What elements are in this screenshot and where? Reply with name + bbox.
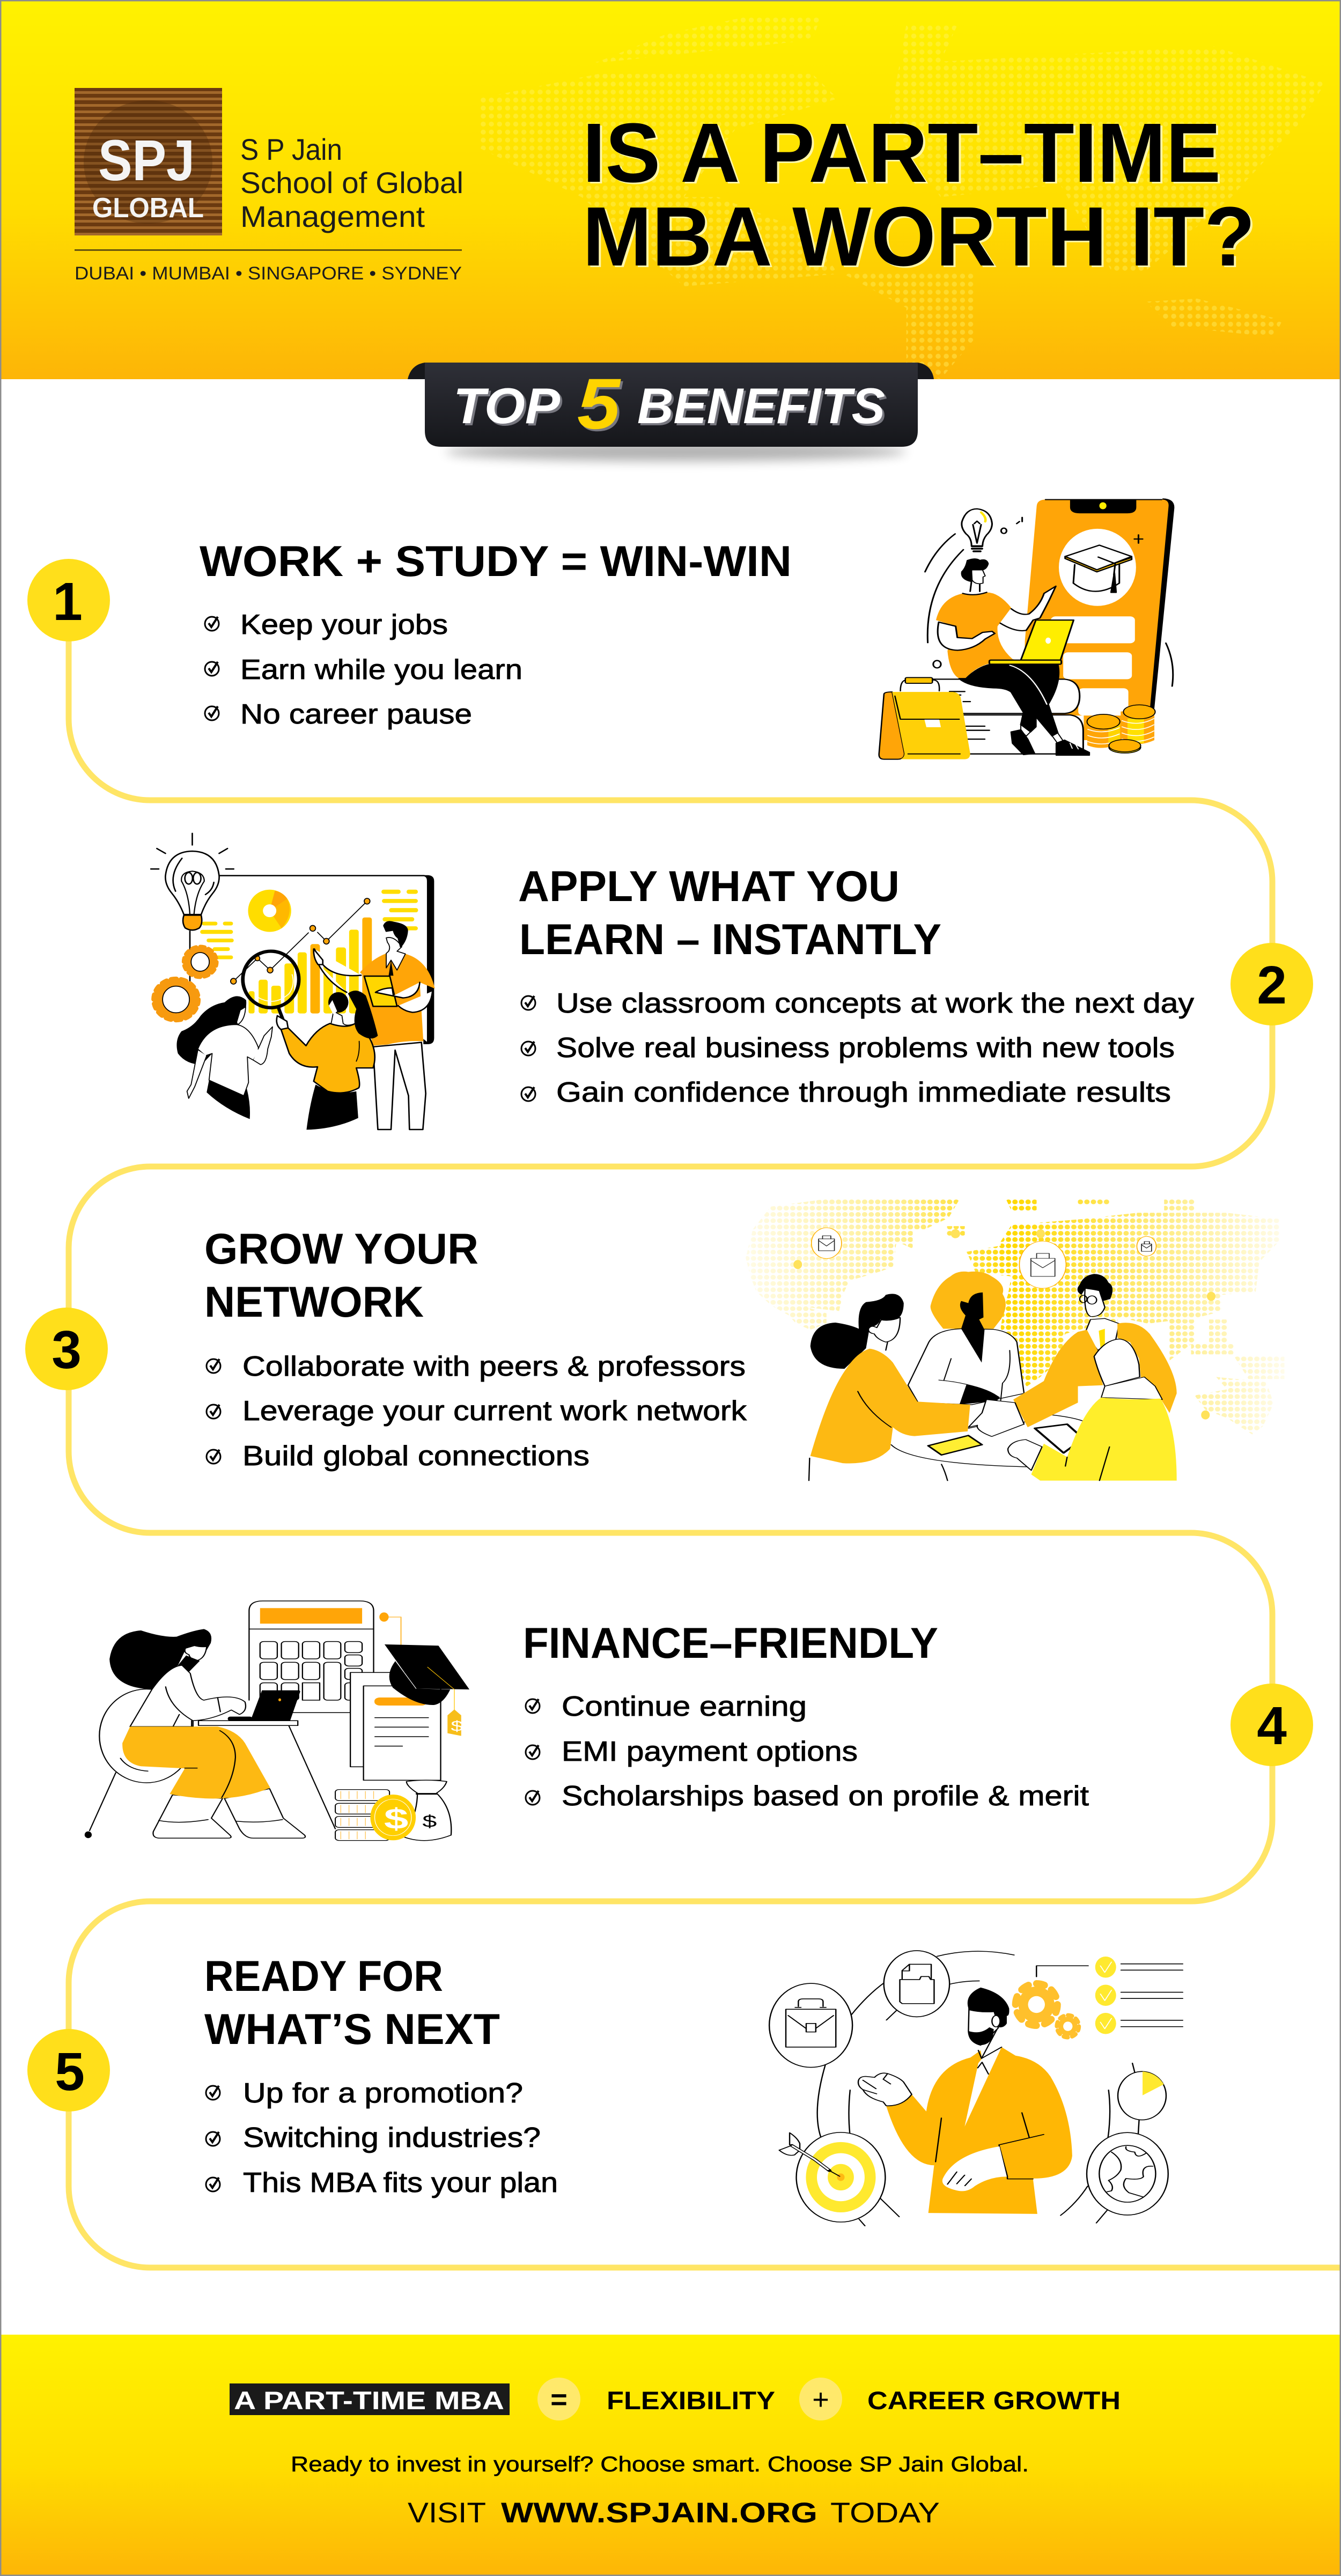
handshake xyxy=(968,1399,1024,1436)
logo xyxy=(75,88,463,284)
woman shaking hands xyxy=(809,1294,970,1481)
panel: benefit 2 text xyxy=(518,862,1194,1108)
bullets 2 xyxy=(521,988,1194,1108)
logo mark: GLOBAL xyxy=(92,193,204,224)
bullets 3 xyxy=(207,1351,747,1472)
banner text xyxy=(453,364,885,444)
woman at laptop xyxy=(109,1629,305,1838)
bullets 5: Switching industries? xyxy=(243,2122,541,2153)
briefcase icon xyxy=(769,1983,852,2068)
header band xyxy=(0,0,1341,379)
desk xyxy=(198,1721,335,1829)
panel: benefit 3 text xyxy=(204,1225,747,1472)
heading 5: WHAT’S NEXT xyxy=(204,2005,500,2054)
heading 4: FINANCE–FRIENDLY xyxy=(523,1619,938,1667)
footer tagline: Ready to invest in yourself? Choose smart. Choose SP Jain Global. xyxy=(291,2453,1029,2476)
person xyxy=(936,559,1089,755)
footer equation: CAREER GROWTH xyxy=(867,2386,1121,2415)
bullets 1: Keep your jobs xyxy=(240,609,448,640)
globe icon xyxy=(1087,2132,1168,2215)
logo wordmark: S P Jain xyxy=(240,132,342,166)
plus icon: + xyxy=(812,2383,829,2416)
logo wordmark: Management xyxy=(240,200,425,233)
title xyxy=(583,106,1255,284)
panel: benefit 1 text xyxy=(200,537,792,730)
bulb xyxy=(151,833,234,983)
map icon bubbles xyxy=(812,1228,1156,1288)
bullets 2: Solve real business problems with new tools xyxy=(556,1032,1175,1064)
pie icon xyxy=(1118,2071,1166,2120)
chair xyxy=(85,1689,194,1838)
coins xyxy=(1087,705,1155,753)
books xyxy=(933,679,1080,713)
bulb xyxy=(962,509,992,551)
dotted world map xyxy=(746,1199,1285,1435)
heading 5 xyxy=(204,1952,500,2054)
panel: benefit 5 text xyxy=(204,1952,558,2198)
bullets 1: No career pause xyxy=(240,699,472,730)
target icon xyxy=(779,2132,885,2222)
bullets 4 xyxy=(526,1691,1089,1812)
logo wordmark: School of Global xyxy=(240,166,463,200)
line chart xyxy=(231,898,370,984)
illustration: global network handshake xyxy=(746,1199,1285,1481)
label pill: A PART-TIME MBA xyxy=(234,2386,504,2415)
number badge 4: 4 xyxy=(1257,1696,1287,1756)
graduation cap: $ xyxy=(451,1718,463,1734)
bullets 5: This MBA fits your plan xyxy=(243,2167,558,2198)
plus icon xyxy=(799,2378,842,2420)
graduation cap xyxy=(379,1612,469,1736)
bullets 2: Use classroom concepts at work the next day xyxy=(556,988,1194,1019)
footer equation xyxy=(230,2378,1121,2420)
bullets 3: Collaborate with peers & professors xyxy=(242,1351,746,1382)
calculator xyxy=(249,1601,374,1713)
title: MBA WORTH IT? xyxy=(583,190,1255,284)
equals icon xyxy=(537,2378,580,2420)
number badge 1 xyxy=(27,559,110,641)
man in yellow blazer xyxy=(858,1988,1072,2214)
woman in white blazer xyxy=(908,1272,1024,1405)
number badge 3: 3 xyxy=(51,1320,82,1380)
heading 1: WORK + STUDY = WIN-WIN xyxy=(200,537,792,586)
laptop xyxy=(989,620,1074,664)
woman with long hair xyxy=(176,996,272,1119)
bullets 3: Leverage your current work network xyxy=(242,1396,747,1427)
laptop xyxy=(228,1691,300,1721)
number badge 1: 1 xyxy=(53,572,83,632)
heading 2: APPLY WHAT YOU xyxy=(518,862,900,911)
footer call to action xyxy=(408,2497,940,2529)
presenter xyxy=(314,922,435,1130)
title: IS A PART–TIME xyxy=(583,106,1221,200)
heading 3 xyxy=(204,1225,478,1326)
connector arcs xyxy=(817,1951,1139,2226)
equals icon: = xyxy=(550,2383,568,2416)
magnifier xyxy=(243,951,299,1023)
connecting yellow path xyxy=(69,638,1341,2268)
illustration: career professional with icons xyxy=(769,1951,1183,2226)
heading 3: NETWORK xyxy=(204,1278,424,1326)
board xyxy=(200,875,434,1044)
coins and money bag xyxy=(335,1780,451,1841)
briefcase xyxy=(879,677,970,759)
footer band xyxy=(0,2335,1341,2576)
footer call to action: WWW.SPJAIN.ORG xyxy=(501,2497,817,2529)
man with glasses xyxy=(1013,1274,1177,1427)
logo locations: DUBAI • MUMBAI • SINGAPORE • SYDNEY xyxy=(75,263,462,284)
bullets 4: Continue earning xyxy=(562,1691,807,1722)
logo wordmark xyxy=(240,132,463,233)
heading 2: LEARN – INSTANTLY xyxy=(519,916,941,964)
dart xyxy=(779,2133,839,2176)
donut chart xyxy=(248,890,291,932)
banner text: TOP xyxy=(453,378,560,434)
panel: benefit 4 text xyxy=(523,1619,1089,1812)
bullets 5: Up for a promotion? xyxy=(243,2078,523,2109)
footer equation: FLEXIBILITY xyxy=(607,2386,775,2415)
footer call to action: TODAY xyxy=(830,2497,940,2529)
bullets 3: Build global connections xyxy=(242,1441,590,1472)
document icon xyxy=(884,1951,949,2017)
bullets 5 xyxy=(206,2078,558,2198)
bullets 1 xyxy=(205,609,522,730)
bullets 4: Scholarships based on profile & merit xyxy=(562,1781,1089,1812)
gears xyxy=(154,947,217,1020)
bullets 4: EMI payment options xyxy=(562,1736,858,1767)
woman in yellow jacket xyxy=(1008,1339,1177,1481)
illustration: student on books with phone xyxy=(879,499,1174,759)
heading 2 xyxy=(518,862,941,964)
table xyxy=(891,1414,1084,1481)
number badge 3 xyxy=(25,1308,108,1390)
documents xyxy=(350,1672,441,1780)
banner text: 5 xyxy=(577,364,622,444)
bullets 2: Gain confidence through immediate results xyxy=(556,1077,1171,1108)
logo mark: SPJ xyxy=(98,128,195,193)
coins and money bag: $ xyxy=(422,1812,437,1831)
number badge 2 xyxy=(1231,943,1313,1025)
heading 3: GROW YOUR xyxy=(204,1225,478,1273)
footer call to action: VISIT xyxy=(408,2497,486,2529)
bullets 1: Earn while you learn xyxy=(240,654,522,685)
coins and money bag: $ xyxy=(384,1803,408,1835)
woman with magnifier xyxy=(277,991,378,1130)
checklist xyxy=(1036,1957,1183,2034)
number badge 5 xyxy=(27,2029,110,2112)
illustration: finance woman with calculator xyxy=(85,1601,469,1841)
number badge 4 xyxy=(1231,1684,1313,1766)
illustration: team reviewing chart xyxy=(151,833,435,1130)
header dotted world map xyxy=(479,16,1325,379)
logo mark xyxy=(75,88,222,235)
heading 5: READY FOR xyxy=(204,1952,443,2001)
number badge 2: 2 xyxy=(1257,955,1287,1015)
gears xyxy=(1015,1983,1079,2038)
banner: top 5 benefits xyxy=(408,363,934,461)
banner text: BENEFITS xyxy=(637,378,885,434)
number badge 5: 5 xyxy=(55,2042,85,2102)
